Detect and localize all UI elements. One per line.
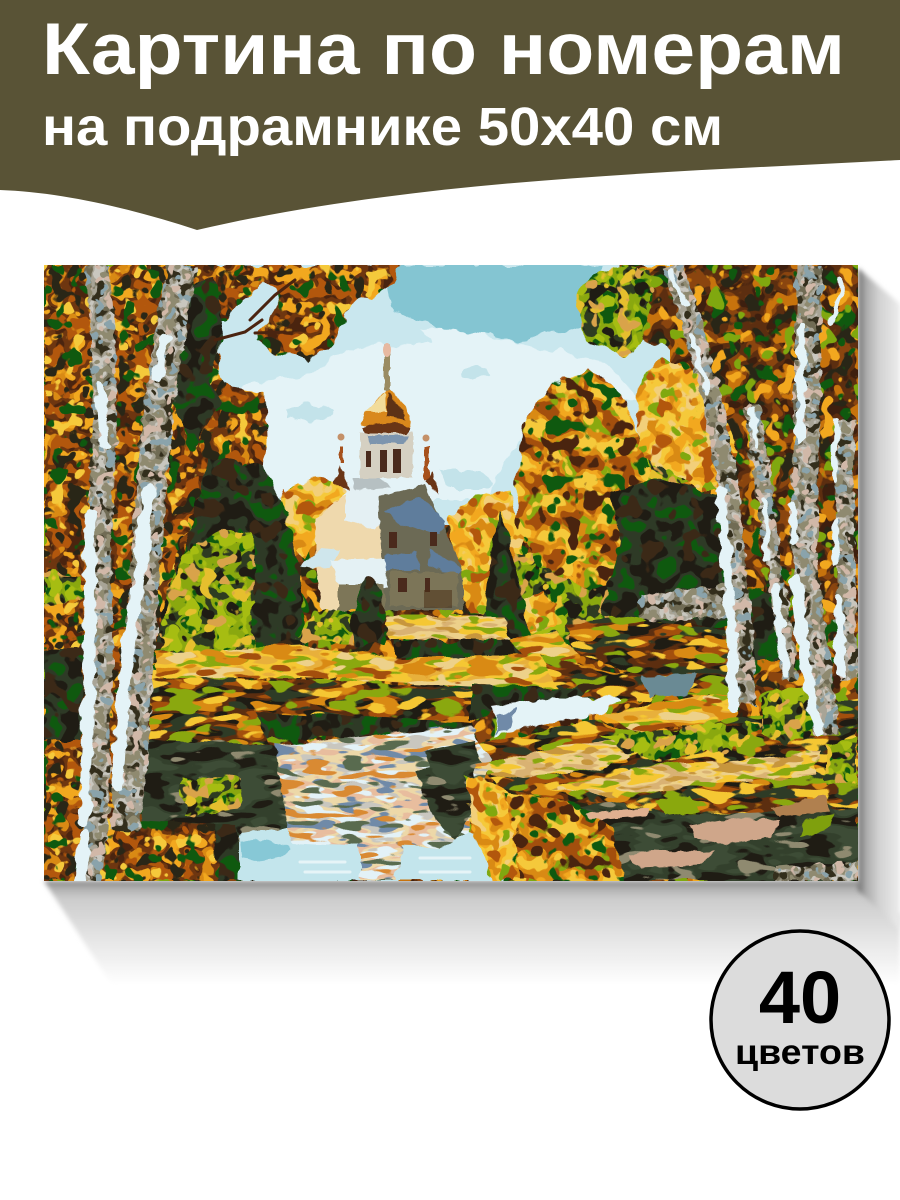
painting: autumn landscape with church: [44, 265, 858, 881]
church: [300, 343, 463, 610]
left foliage: autumn leaves: [44, 265, 400, 881]
dark tree reflection: [415, 740, 480, 840]
dark hedge behind meadow: [250, 640, 530, 740]
bottom right undergrowth: [775, 862, 858, 881]
right foliage: brown and dark crowns: [620, 265, 670, 350]
yellow meadow: [155, 630, 745, 732]
canvas drop shadow: [44, 268, 900, 985]
badge number: 40: [759, 956, 841, 1039]
right foliage: yellow crown: [505, 360, 738, 640]
badge label: цветов: [735, 1033, 865, 1072]
brown river bank: [150, 618, 858, 805]
right foliage: green crown top: [498, 265, 692, 650]
dark foreground: [580, 790, 858, 881]
foreground paths: [475, 738, 820, 797]
stream reflection of trees: [465, 775, 530, 881]
dark fir in front of church: [353, 578, 383, 645]
stones: [585, 795, 835, 868]
dark water on left: [141, 739, 288, 842]
right foliage: orange tree: [513, 368, 652, 590]
badge: 40 colours: [711, 931, 889, 1109]
right dark forest: [250, 470, 790, 660]
green reflection patch: [180, 775, 243, 815]
sky: [200, 265, 670, 525]
water streaks: [300, 858, 470, 872]
waterfall: [492, 674, 698, 735]
reflection of sky and church: [275, 725, 490, 881]
far meadow strip with path: [385, 616, 510, 640]
birch trunks white bark: [80, 270, 843, 878]
orange-green reflection: [505, 790, 632, 881]
left foliage: dark forest: [44, 280, 305, 881]
brown foreground strip: [620, 782, 858, 815]
far yellow trees beside church: [281, 479, 525, 615]
title: Картина по номерам: [42, 9, 845, 90]
right bank green patches: [600, 685, 858, 792]
pale water: [238, 825, 510, 881]
branches over sky: [215, 280, 295, 340]
left foliage: bright green bushes: [44, 528, 355, 655]
dark stream bank: [470, 685, 610, 722]
birch trunks bark: [90, 265, 850, 881]
distant tan tree trunks: [640, 585, 725, 622]
subtitle: на подрамнике 50х40 см: [42, 97, 723, 157]
header banner: [0, 0, 900, 230]
